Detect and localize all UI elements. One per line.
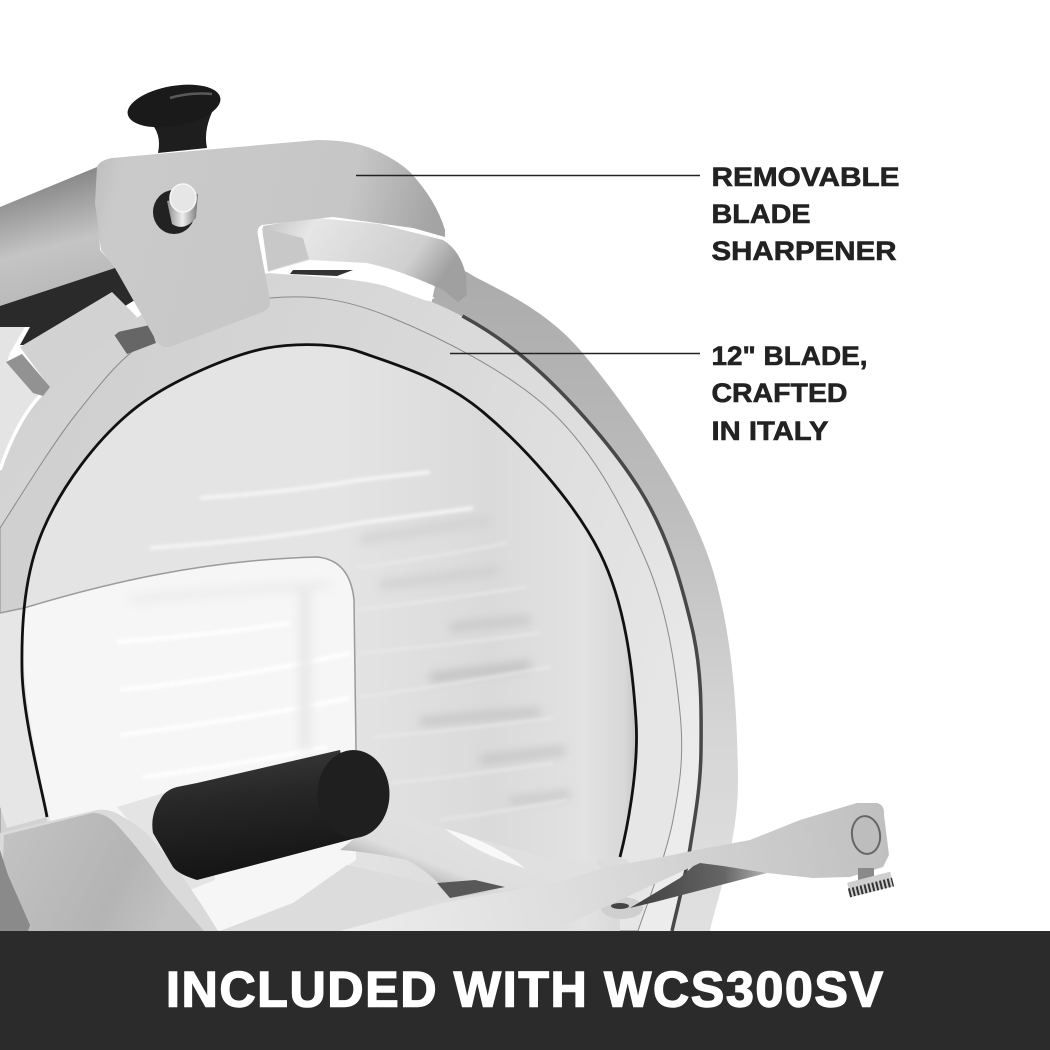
label text: IN ITALY — [712, 416, 828, 446]
bright ripple lines — [150, 472, 567, 820]
under bar block — [113, 325, 156, 354]
left background piece — [0, 327, 43, 470]
dark sliver under sharpener — [290, 270, 353, 276]
arm pivot disc — [849, 814, 883, 856]
window edge — [0, 557, 356, 750]
hub rim — [0, 810, 218, 931]
leader line — [450, 352, 700, 354]
stalk highlight — [445, 829, 525, 868]
lower guard area — [220, 865, 450, 931]
pin — [153, 184, 198, 234]
inner blade ring — [0, 297, 682, 931]
lower round fitting — [601, 897, 643, 919]
blade edge — [22, 345, 637, 857]
label text: 12" BLADE, — [712, 341, 868, 371]
lower left ring area — [0, 608, 47, 828]
white sliver under sharpener — [350, 272, 435, 301]
lever left facet — [262, 228, 309, 271]
soft grey blurs — [360, 520, 570, 802]
black knob — [124, 78, 224, 153]
bottom banner — [0, 931, 1050, 1050]
slicer illustration — [0, 78, 893, 931]
transparent food guard window — [23, 557, 356, 931]
dark wedge — [0, 268, 135, 345]
banner title: INCLUDED WITH WCS300SV — [166, 962, 884, 1018]
guard ring — [0, 273, 701, 931]
handle collar — [117, 783, 215, 890]
dark groove line — [462, 316, 701, 931]
base hub — [0, 810, 218, 931]
blade streaks — [150, 472, 570, 820]
window streaks — [117, 585, 350, 777]
hub face — [0, 813, 204, 931]
bar end facet — [6, 354, 50, 396]
upper round fitting — [597, 857, 629, 869]
banner background — [0, 931, 1050, 1050]
black handle cylinder — [152, 750, 390, 880]
sharpener lever — [263, 218, 467, 302]
outer blade guard — [300, 262, 738, 931]
fence arm — [340, 803, 889, 931]
hub dark fitting — [0, 850, 30, 931]
label text: CRAFTED — [712, 378, 848, 408]
callout: removable blade sharpener — [356, 162, 900, 266]
label text: SHARPENER — [712, 236, 896, 266]
bevelled bar — [20, 292, 137, 388]
label text: BLADE — [712, 199, 810, 229]
arm shadow — [630, 860, 767, 908]
callout: 12 inch blade — [450, 341, 868, 446]
left arm — [0, 167, 118, 307]
handle stalk — [340, 810, 627, 898]
stalk shadow — [437, 880, 505, 898]
sharpener plate — [95, 140, 445, 347]
white gap left of ring — [0, 393, 43, 470]
circular blade — [22, 345, 637, 931]
thumb nut — [849, 868, 893, 893]
leader line — [356, 174, 700, 176]
label text: REMOVABLE — [712, 162, 900, 192]
